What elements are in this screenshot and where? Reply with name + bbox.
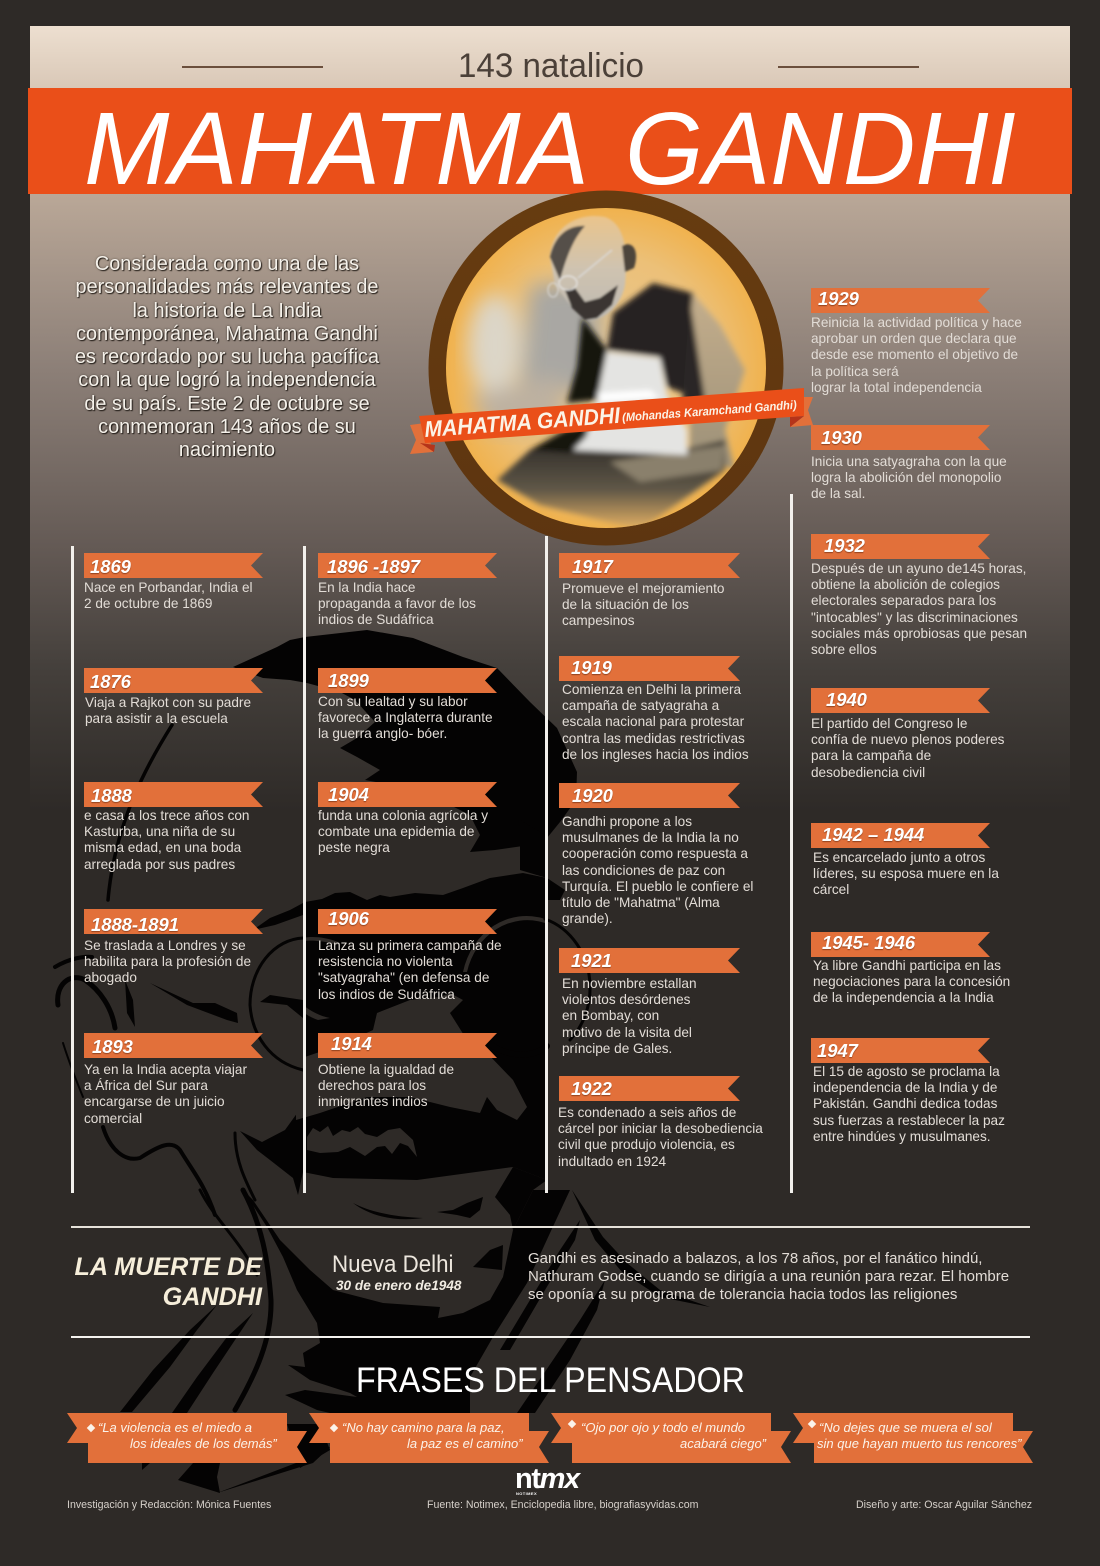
entry 1920: Gandhi propone a los <box>562 814 692 829</box>
portrait medallion <box>428 190 784 546</box>
entry 1914: 1914 <box>331 1033 372 1054</box>
entry 1932: sociales más oprobiosas que pesan <box>811 626 1027 641</box>
entry 1888: 1888 <box>91 784 132 806</box>
intro paragraph: conmemoran 143 años de su <box>98 416 356 438</box>
entry 1888 <box>84 782 263 872</box>
timeline line 1 <box>71 546 74 1193</box>
date: 30 de enero de1948 <box>336 1278 461 1293</box>
entry 1896-1897: propaganda a favor de los <box>318 596 476 611</box>
entry 1904: 1904 <box>328 784 369 804</box>
title text <box>84 91 1016 194</box>
entry 1893: a África del Sur para <box>84 1078 208 1093</box>
entry 1929: 1929 <box>818 288 859 309</box>
entry 1929: lograr la total independencia <box>811 380 982 395</box>
intro paragraph: nacimiento <box>179 439 275 461</box>
entry 1893: Ya en la India acepta viajar <box>84 1062 247 1077</box>
entry 1876: 1876 <box>90 671 131 692</box>
quote 1: “La violencia es el miedo a <box>98 1420 252 1435</box>
quote 1: los ideales de los demás” <box>130 1436 277 1451</box>
intro paragraph: la historia de La India <box>132 300 322 322</box>
timeline line 2 <box>303 546 306 1193</box>
entry 1947: El 15 de agosto se proclama la <box>813 1064 1000 1079</box>
entry 1899: favorece a Inglaterra durante <box>318 710 493 725</box>
entry 1932: obtiene la abolición de colegios <box>811 577 1000 592</box>
quote 4: “No dejes que se muera el sol <box>819 1420 992 1435</box>
entry 1945-1946 <box>811 932 1010 1005</box>
entry 1921: En noviembre estallan <box>562 976 697 991</box>
entry 1932: Después de un ayuno de145 horas, <box>811 561 1026 576</box>
intro paragraph: personalidades más relevantes de <box>76 276 378 298</box>
entry 1947: 1947 <box>817 1040 858 1060</box>
death description <box>528 1250 1009 1303</box>
entry 1919: contra las medidas restrictivas <box>562 731 745 746</box>
entry 1945-1946: de la independencia a la India <box>813 990 994 1005</box>
entry 1919: 1919 <box>571 657 612 678</box>
entry 1947 <box>811 1038 1005 1144</box>
entry 1942-1944: líderes, su esposa muere en la <box>813 866 999 881</box>
credit: design: Diseño y arte: Oscar Aguilar Sánchez <box>856 1499 1032 1511</box>
entry 1942-1944: Es encarcelado junto a otros <box>813 850 985 865</box>
entry 1922: 1922 <box>571 1078 612 1099</box>
entry 1896-1897 <box>318 553 497 627</box>
entry 1940: 1940 <box>826 689 867 710</box>
entry 1921: en Bombay, con <box>562 1008 659 1023</box>
entry 1929: la política será <box>811 364 899 379</box>
entry 1904 <box>318 782 497 855</box>
entry 1929: aprobar un orden que declara que <box>811 331 1017 346</box>
entry 1921: violentos desórdenes <box>562 992 690 1007</box>
entry 1920 <box>559 783 753 926</box>
entry 1914: derechos para los <box>318 1078 426 1093</box>
entry 1906: 1906 <box>328 908 369 929</box>
logo: ntmx: NOTIMEX <box>516 1491 537 1496</box>
quote 1 <box>67 1413 307 1463</box>
entry 1876: para asistir a la escuela <box>85 711 228 726</box>
entry 1914: Obtiene la igualdad de <box>318 1062 454 1077</box>
ring <box>428 190 784 546</box>
entry 1888: arreglada por sus padres <box>84 857 235 872</box>
ribbon: Mahatma Gandhi name <box>410 388 813 454</box>
entry 1919: de los ingleses hacia los indios <box>562 747 749 762</box>
entry 1906 <box>318 908 502 1002</box>
entry 1922 <box>558 1076 763 1169</box>
entry 1920: grande). <box>562 911 613 926</box>
entry 1869: Nace en Porbandar, India el <box>84 580 253 595</box>
entry 1920: 1920 <box>572 785 613 806</box>
entry 1920: cooperación como respuesta a <box>562 846 748 861</box>
entry 1921: 1921 <box>571 950 612 971</box>
death description: Nathuram Godse, cuando se dirigía a una reunión para rezar. El hombre <box>528 1268 1009 1285</box>
entry 1920: Turquía. El pueblo le confiere el <box>562 879 753 894</box>
entry 1929: desde ese momento el objetivo de <box>811 347 1018 362</box>
ribbon: Mahatma Gandhi name: MAHATMA GANDHI <box>424 403 622 442</box>
entry 1888: misma edad, en una boda <box>84 840 241 855</box>
photograph of Gandhi <box>469 216 745 530</box>
entry 1906: "satyagraha" (en defensa de <box>318 970 489 985</box>
entry 1930: logra la abolición del monopolio <box>811 470 1001 485</box>
intro paragraph: es recordado por su lucha pacífica <box>75 346 379 368</box>
entry 1932 <box>811 534 1027 657</box>
subtitle rule left <box>182 66 323 68</box>
intro paragraph: con la que logró la independencia <box>78 369 376 391</box>
entry 1917 <box>559 553 740 628</box>
entry 1919: Comienza en Delhi la primera <box>562 682 741 697</box>
entry 1940: desobediencia civil <box>811 765 925 780</box>
entry 1922: indultado en 1924 <box>558 1154 666 1169</box>
entry 1945-1946: Ya libre Gandhi participa en las <box>813 958 1001 973</box>
entry 1917: Promueve el mejoramiento <box>562 581 724 596</box>
entry 1888: Kasturba, una niña de su <box>84 824 235 839</box>
entry 1914 <box>318 1033 497 1109</box>
entry 1940: para la campaña de <box>811 748 931 763</box>
entry 1932: 1932 <box>824 535 865 556</box>
quote 2: la paz es el camino” <box>407 1436 523 1451</box>
entry 1914: inmigrantes indios <box>318 1094 428 1109</box>
entry 1942-1944 <box>811 823 999 897</box>
entry 1940 <box>811 688 1004 780</box>
entry 1899 <box>318 668 497 741</box>
entry 1930: 1930 <box>821 427 862 448</box>
entry 1876 <box>84 668 263 726</box>
entry 1947: Pakistán. Gandhi dedica todas <box>813 1096 997 1111</box>
entry 1893: encargarse de un juicio <box>84 1094 225 1109</box>
entry 1919: escala nacional para protestar <box>562 714 744 729</box>
entry 1920: musulmanes de la India la no <box>562 830 739 845</box>
entry 1869: 2 de octubre de 1869 <box>84 596 212 611</box>
entry 1888-1891: 1888-1891 <box>91 914 179 935</box>
entry 1904: peste negra <box>318 840 390 855</box>
entry 1940: El partido del Congreso le <box>811 716 967 731</box>
entry 1947: independencia de la India y de <box>813 1080 997 1095</box>
entry 1932: "intocables" y las discriminaciones <box>811 610 1018 625</box>
entry 1906: resistencia no violenta <box>318 954 453 969</box>
subtitle rule right <box>778 66 919 68</box>
entry 1893: 1893 <box>92 1036 133 1056</box>
heading: La muerte de Gandhi: LA MUERTE DE <box>74 1253 262 1281</box>
credit: research: Investigación y Redacción: Mónica Fuentes <box>67 1499 271 1511</box>
entry 1896-1897: indios de Sudáfrica <box>318 612 434 627</box>
entry 1917: campesinos <box>562 613 635 628</box>
place: Nueva Delhi: Nueva Delhi <box>332 1251 453 1278</box>
title banner <box>28 88 1072 194</box>
entry 1932: electorales separados para los <box>811 593 996 608</box>
timeline line 4 <box>790 494 793 1193</box>
death description: se oponía a su programa de tolerancia hacia todos las religiones <box>528 1286 957 1303</box>
entry 1942-1944: 1942 – 1944 <box>822 824 924 845</box>
entry 1869 <box>84 553 263 611</box>
entry 1893 <box>84 1033 263 1126</box>
entry 1929: Reinicia la actividad política y hace <box>811 315 1022 330</box>
entry 1942-1944: cárcel <box>813 882 849 897</box>
quote 4: sin que hayan muerto tus rencores” <box>817 1436 1022 1451</box>
entry 1930: de la sal. <box>811 486 865 501</box>
entry 1947: sus fuerzas a restablecer la paz <box>813 1113 1005 1128</box>
entry 1896-1897: En la India hace <box>318 580 416 595</box>
entry 1929 <box>811 288 1022 395</box>
entry 1888-1891: Se traslada a Londres y se <box>84 938 246 953</box>
timeline line 3 <box>545 536 548 1193</box>
entry 1876: Viaja a Rajkot con su padre <box>85 695 251 710</box>
quote 4 <box>793 1413 1033 1463</box>
entry 1930 <box>811 425 1007 501</box>
divider upper <box>71 1226 1030 1228</box>
entry 1888-1891: abogado <box>84 970 137 985</box>
entry 1947: entre hindúes y musulmanes. <box>813 1129 991 1144</box>
entry 1917: 1917 <box>572 556 613 577</box>
intro paragraph: de su país. Este 2 de octubre se <box>84 393 370 415</box>
entry 1869: 1869 <box>90 556 131 576</box>
intro paragraph: Considerada como una de las <box>95 253 359 275</box>
entry 1922: cárcel por iniciar la desobediencia <box>558 1121 763 1136</box>
heading: La muerte de Gandhi <box>74 1253 262 1311</box>
entry 1906: Lanza su primera campaña de <box>318 938 502 953</box>
entry 1917: de la situación de los <box>562 597 689 612</box>
entry 1930: Inicia una satyagraha con la que <box>811 454 1007 469</box>
entry 1904: funda una colonia agrícola y <box>318 808 488 823</box>
entry 1919: campaña de satyagraha a <box>562 698 719 713</box>
entry 1922: Es condenado a seis años de <box>558 1105 736 1120</box>
entry 1904: combate una epidemia de <box>318 824 474 839</box>
entry 1919 <box>559 656 749 762</box>
quote 3 <box>551 1413 791 1463</box>
heading: La muerte de Gandhi: GANDHI <box>163 1283 262 1311</box>
entry 1899: la guerra anglo- bóer. <box>318 726 447 741</box>
entry 1922: civil que produjo violencia, es <box>558 1137 735 1152</box>
entry 1921: motivo de la visita del <box>562 1025 692 1040</box>
heading: Frases del pensador: FRASES DEL PENSADOR <box>356 1361 745 1400</box>
entry 1893: comercial <box>84 1111 142 1126</box>
entry 1921: príncipe de Gales. <box>562 1041 672 1056</box>
entry 1940: confía de nuevo plenos poderes <box>811 732 1004 747</box>
divider lower <box>71 1336 1030 1338</box>
credit: source: Fuente: Notimex, Enciclopedia libre, biografiasyvidas.com <box>427 1499 698 1511</box>
entry 1888-1891 <box>84 909 263 985</box>
entry 1932: sobre ellos <box>811 642 877 657</box>
death description: Gandhi es asesinado a balazos, a los 78 años, por el fanático hindú, <box>528 1250 982 1267</box>
background gradient panel <box>30 26 1070 816</box>
entry 1920: título de "Mahatma" (Alma <box>562 895 720 910</box>
entry 1945-1946: 1945- 1946 <box>822 932 915 953</box>
quote 3: acabará ciego” <box>680 1436 766 1451</box>
intro paragraph: contemporánea, Mahatma Gandhi <box>76 323 378 345</box>
quote 2: “No hay camino para la paz, <box>342 1420 505 1435</box>
entry 1906: los indios de Sudáfrica <box>318 987 455 1002</box>
subtitle: 143 natalicio: 143 natalicio <box>458 47 644 85</box>
intro paragraph <box>74 253 381 461</box>
entry 1920: las condiciones de paz con <box>562 863 725 878</box>
entry 1899: Con su lealtad y su labor <box>318 694 468 709</box>
entry 1896-1897: 1896 -1897 <box>327 556 420 576</box>
ribbon: Mahatma Gandhi name: (Mohandas Karamchand Gandhi) <box>622 398 797 424</box>
entry 1888-1891: habilita para la profesión de <box>84 954 251 969</box>
quote 3: “Ojo por ojo y todo el mundo <box>581 1420 745 1435</box>
entry 1921 <box>559 948 740 1056</box>
entry 1945-1946: negociaciones para la concesión <box>813 974 1010 989</box>
quote 2 <box>309 1413 549 1463</box>
entry 1888: e casa a los trece años con <box>84 808 250 823</box>
entry 1899: 1899 <box>328 670 369 690</box>
logo: ntmx: ntmx <box>515 1463 579 1495</box>
